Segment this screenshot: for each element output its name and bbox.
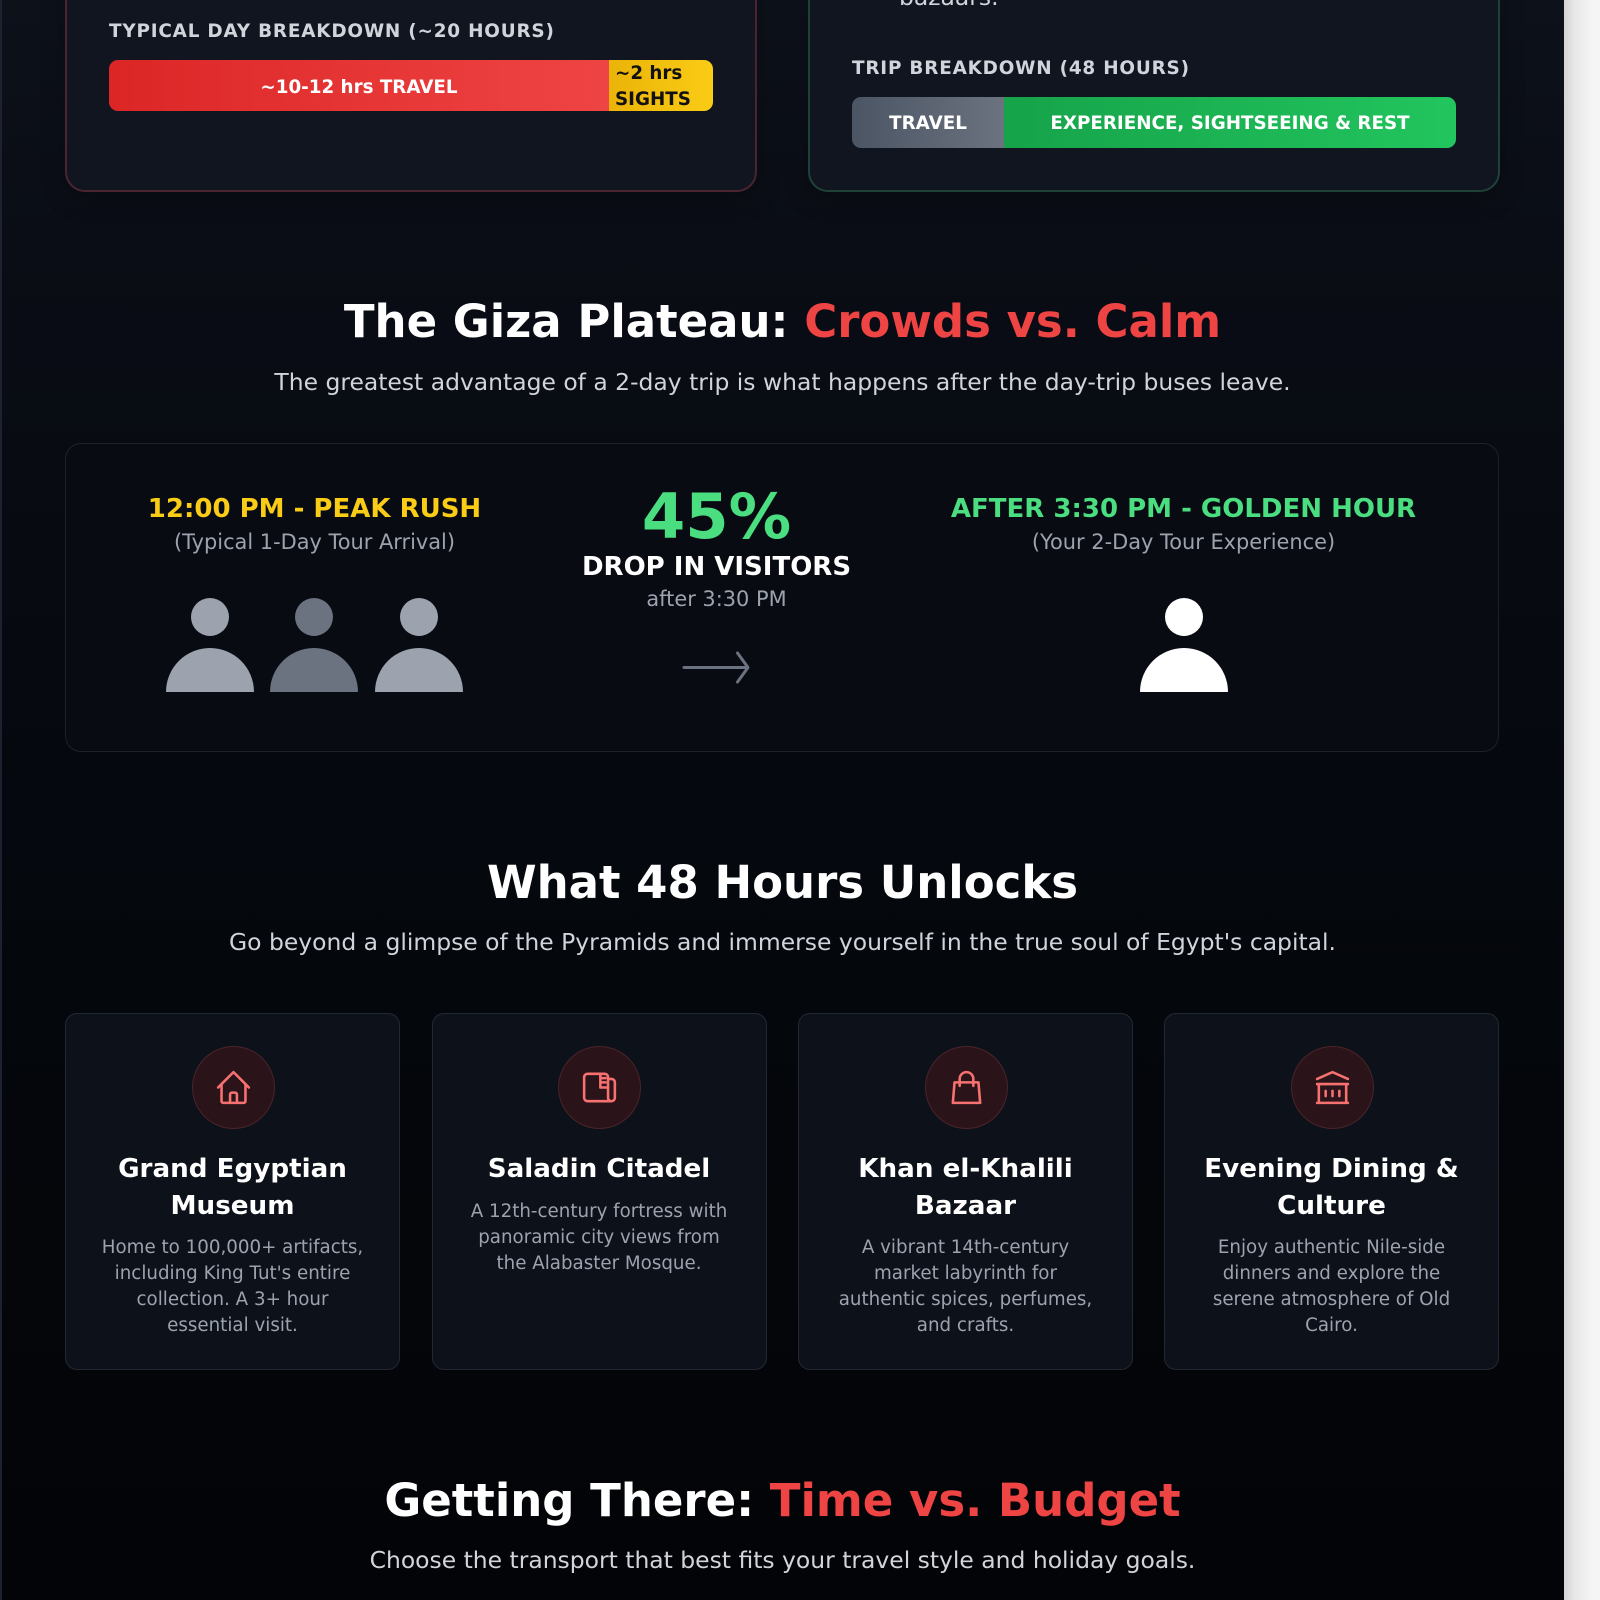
card description: collection. A 3+ hour xyxy=(137,1289,328,1310)
panel: one-day tour xyxy=(65,0,757,192)
card description xyxy=(839,1237,1092,1336)
card title: Bazaar xyxy=(915,1191,1016,1221)
card: evening dining xyxy=(1164,1013,1499,1370)
bar: trip xyxy=(852,97,1456,148)
segment: travel xyxy=(852,97,1004,148)
card title: Culture xyxy=(1277,1191,1386,1221)
panel: two-day tour xyxy=(808,0,1500,192)
icon: home xyxy=(192,1046,274,1129)
card description: Home to 100,000+ artifacts, xyxy=(102,1237,363,1258)
segment: sights: SIGHTS xyxy=(615,89,691,110)
segment: experience: EXPERIENCE, SIGHTSEEING & REST xyxy=(1050,113,1410,134)
stat label: DROP IN VISITORS xyxy=(582,552,851,582)
label: golden hour: AFTER 3:30 PM - GOLDEN HOUR xyxy=(951,494,1416,524)
bar: typical day xyxy=(109,60,713,111)
segment: experience xyxy=(1004,97,1456,148)
stat: 45%: 45% xyxy=(642,480,791,553)
label: trip breakdown: TRIP BREAKDOWN (48 HOURS) xyxy=(852,58,1190,78)
card title xyxy=(118,1154,347,1221)
arrow xyxy=(682,651,750,684)
segment: travel: ~10-12 hrs TRAVEL xyxy=(260,77,458,98)
person 3 xyxy=(375,598,463,692)
label: your experience: (Your 2-Day Tour Experience) xyxy=(1032,530,1335,554)
card description: market labyrinth for xyxy=(874,1263,1057,1284)
stat note: after 3:30 PM xyxy=(646,587,787,611)
card description: Cairo. xyxy=(1305,1315,1358,1336)
card title: Evening Dining & xyxy=(1204,1154,1459,1184)
card title: Saladin Citadel xyxy=(488,1154,710,1184)
card: khan el-khalili xyxy=(798,1013,1133,1370)
people: crowd xyxy=(166,598,463,692)
card description: A 12th-century fortress with xyxy=(471,1200,727,1222)
icon: newspaper xyxy=(558,1046,641,1129)
card description xyxy=(102,1237,363,1336)
panel: crowds comparison xyxy=(65,443,1499,752)
card description: and crafts. xyxy=(917,1315,1014,1336)
heading: giza plateau: The Giza Plateau: Crowds vs. Calm xyxy=(344,295,1221,348)
card title: Grand Egyptian xyxy=(118,1154,347,1184)
card title: Museum xyxy=(170,1191,294,1221)
card description: essential visit. xyxy=(167,1315,298,1336)
subtitle: giza plateau: The greatest advantage of a 2-day trip is what happens after the day-trip buses leave. xyxy=(274,368,1291,396)
card title xyxy=(858,1154,1073,1221)
subtitle: getting there: Choose the transport that best fits your travel style and holiday goals. xyxy=(370,1546,1195,1574)
card: saladin citadel xyxy=(432,1013,766,1370)
card description: panoramic city views from xyxy=(478,1226,720,1248)
card: grand egyptian museum xyxy=(65,1013,400,1370)
card description: Enjoy authentic Nile-side xyxy=(1218,1237,1445,1258)
person: single visitor xyxy=(1140,598,1228,692)
card description: authentic spices, perfumes, xyxy=(839,1289,1092,1310)
card description xyxy=(471,1200,727,1274)
card title xyxy=(1204,1154,1459,1221)
card description: serene atmosphere of Old xyxy=(1213,1289,1450,1310)
person 2 xyxy=(270,598,358,692)
person 1 xyxy=(166,598,254,692)
segment: travel xyxy=(108,60,608,111)
segment: sights: ~2 hrs xyxy=(615,63,682,84)
light page edge xyxy=(1564,0,1600,1600)
card description: the Alabaster Mosque. xyxy=(496,1252,702,1274)
label: peak rush: 12:00 PM - PEAK RUSH xyxy=(148,494,481,524)
icon: shopping bag xyxy=(924,1046,1008,1129)
subtitle: unlocks: Go beyond a glimpse of the Pyramids and immerse yourself in the true soul of Egypt's capital. xyxy=(229,928,1336,956)
segment: travel: TRAVEL xyxy=(889,113,967,134)
label: typical arrival: (Typical 1-Day Tour Arrival) xyxy=(174,530,455,554)
card description: dinners and explore the xyxy=(1223,1263,1440,1284)
heading: getting there: Getting There: Time vs. Budget xyxy=(384,1474,1181,1527)
card description xyxy=(1213,1237,1450,1336)
card description: including King Tut's entire xyxy=(115,1263,350,1284)
icon: library xyxy=(1290,1046,1374,1129)
card description: A vibrant 14th-century xyxy=(862,1237,1069,1258)
label: typical day breakdown: TYPICAL DAY BREAKDOWN (~20 HOURS) xyxy=(109,21,555,42)
card title: Khan el-Khalili xyxy=(858,1154,1073,1184)
heading: what 48 hours unlocks: What 48 Hours Unlocks xyxy=(487,856,1078,909)
segment: sights xyxy=(608,60,712,111)
